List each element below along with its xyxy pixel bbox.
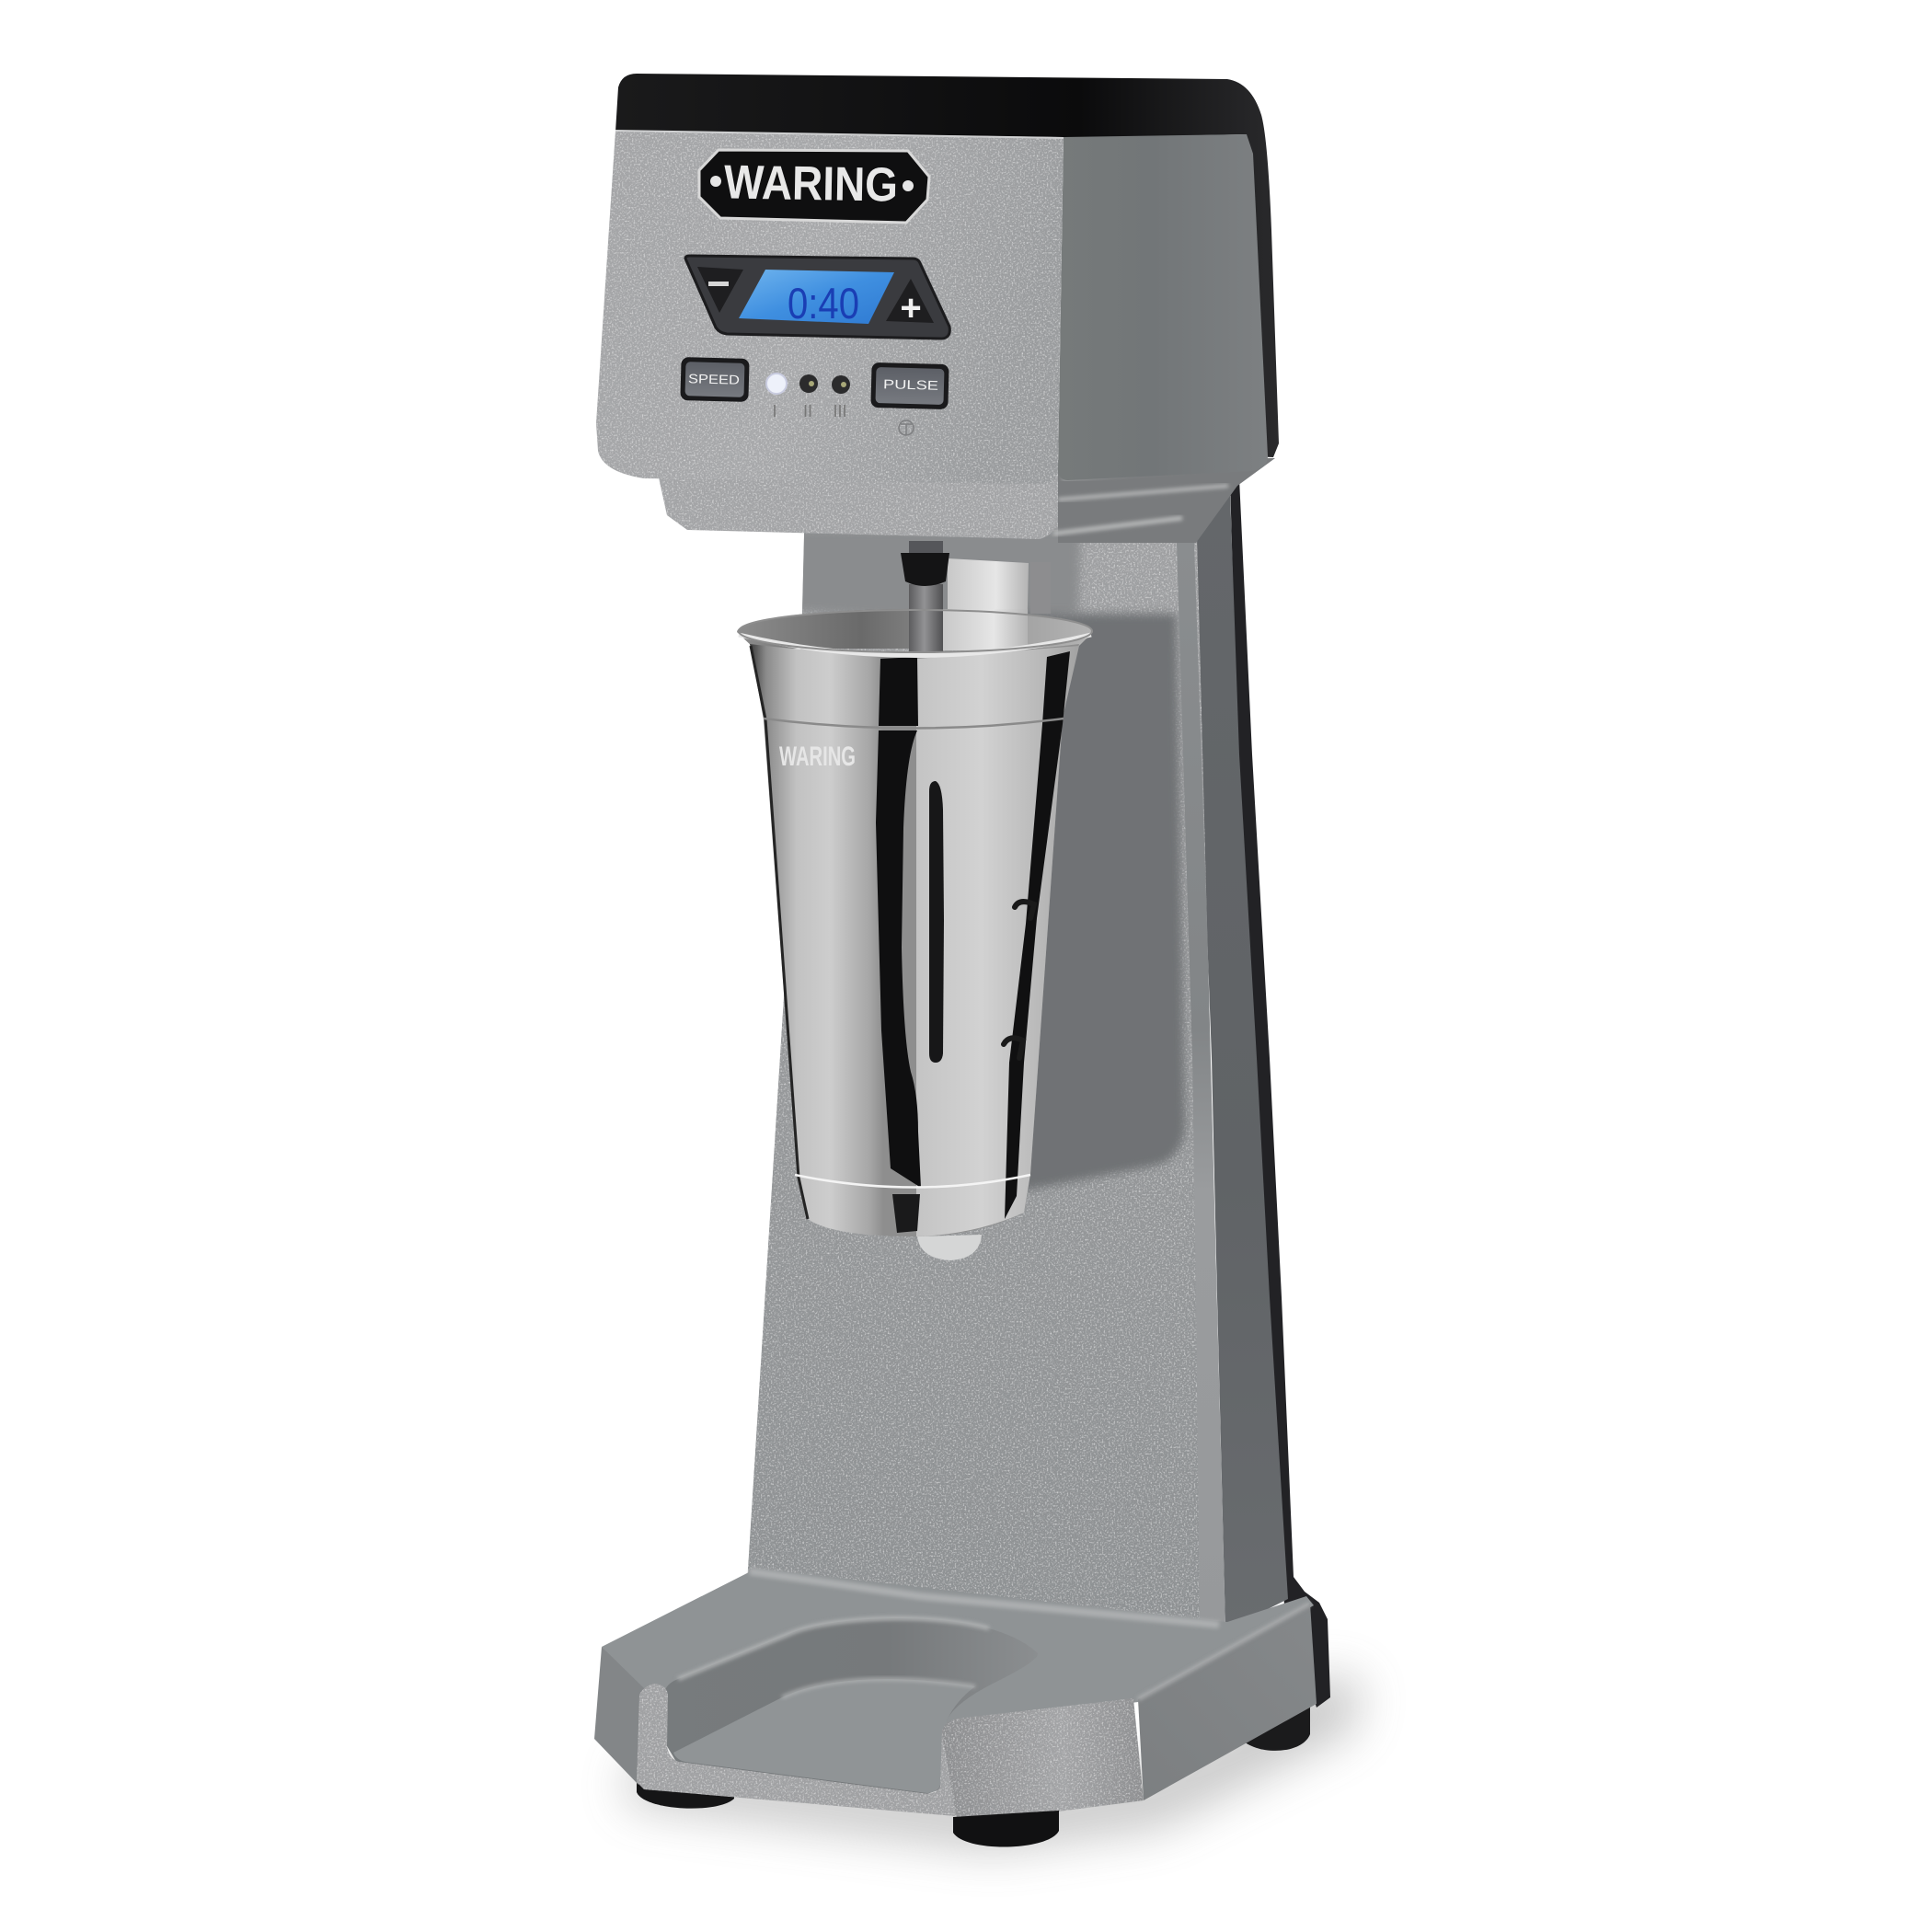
timer panel xyxy=(685,256,949,339)
pulse button: PULSE xyxy=(883,376,938,393)
bottom bead xyxy=(795,1175,1030,1187)
collar front xyxy=(658,469,1058,539)
shadow under base xyxy=(626,1674,1362,1849)
product illustration: drink mixer xyxy=(594,74,1377,1871)
speed button xyxy=(680,357,750,402)
speed button: SPEED xyxy=(688,371,740,387)
pulse button xyxy=(870,362,949,409)
black collar xyxy=(901,553,949,586)
tower side face xyxy=(1192,492,1288,1630)
mug pocket wall xyxy=(664,1618,1038,1794)
speed indicator lights: II xyxy=(803,402,812,420)
dark reflection centre xyxy=(876,657,921,1188)
base right face xyxy=(1138,1604,1317,1800)
cup left edge shine xyxy=(751,646,808,1219)
milkshake cup xyxy=(737,609,1093,1260)
dark reflection right xyxy=(1005,651,1070,1219)
cup logo: WARING xyxy=(779,742,856,772)
cup shadow on tower xyxy=(1027,607,1190,1196)
collar right ridges xyxy=(1058,458,1275,543)
cup body xyxy=(750,644,1079,1236)
speed indicator lights: I xyxy=(772,402,777,420)
Waring badge xyxy=(699,150,929,223)
rear post xyxy=(1030,562,1051,614)
interior of shaft and plate, visible in cup xyxy=(909,609,1028,650)
base left face xyxy=(594,1647,647,1785)
agitator assembly xyxy=(901,541,1051,653)
spindle xyxy=(909,541,943,554)
LCD display: 0:40 xyxy=(788,279,859,328)
front foot xyxy=(953,1811,1059,1847)
minus button xyxy=(697,267,743,313)
tower edge band xyxy=(1177,543,1225,1625)
splash plate xyxy=(948,558,1029,646)
rear feet xyxy=(637,1707,1310,1809)
upper band groove xyxy=(764,719,1064,729)
cup interior xyxy=(737,609,1093,649)
speed indicator lights: III xyxy=(833,402,847,420)
tower front face xyxy=(747,497,1225,1628)
Waring badge: WARING xyxy=(724,155,898,213)
head side panel xyxy=(1058,134,1268,480)
head front panel xyxy=(596,131,1064,484)
head black lid xyxy=(615,74,1279,457)
LCD display xyxy=(739,270,894,328)
pocket highlights xyxy=(678,1618,989,1679)
mug pocket floor xyxy=(673,1679,975,1793)
head collar xyxy=(658,458,1275,543)
base front lip xyxy=(637,1684,987,1819)
cup right reflection xyxy=(916,646,1079,1236)
base top surface xyxy=(602,1569,1314,1789)
plate shadow on tower xyxy=(791,529,1081,626)
base highlight ridge xyxy=(750,1571,1219,1625)
plus button: + xyxy=(900,288,922,328)
timer symbol xyxy=(899,420,914,435)
black rear spine xyxy=(1230,478,1330,1708)
droplets xyxy=(1004,902,1034,1058)
centre slot xyxy=(929,781,944,1063)
base xyxy=(594,1569,1317,1821)
base front block xyxy=(942,1698,1144,1821)
speed indicator lights xyxy=(766,374,850,420)
agitator tip xyxy=(917,1235,982,1260)
rim xyxy=(739,635,1091,655)
plus button xyxy=(886,279,934,328)
